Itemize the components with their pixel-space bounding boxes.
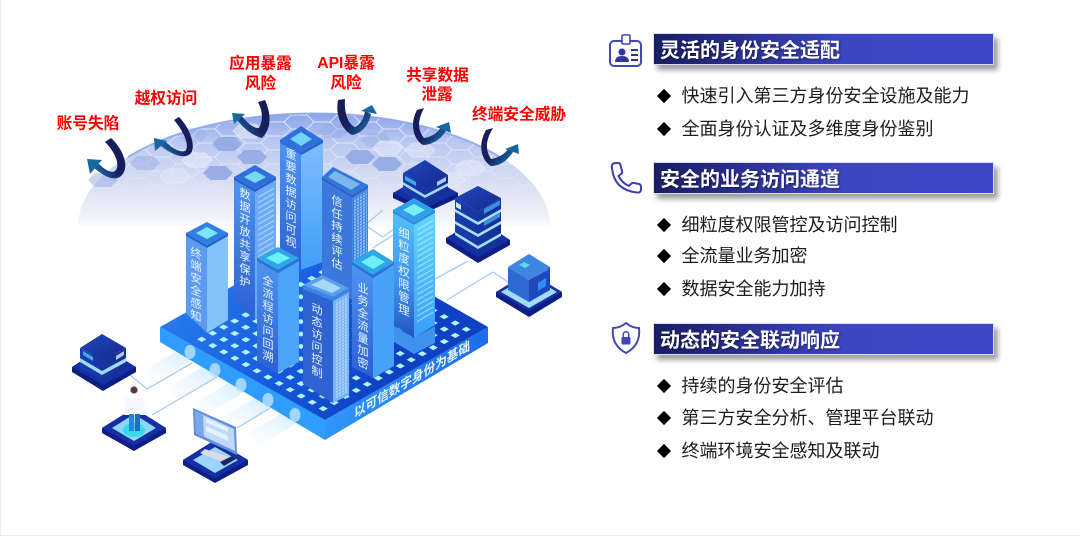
tower: 细粒度权限管理 <box>393 198 435 354</box>
tower: 重要数据访问可视 <box>280 126 323 270</box>
bullet: continuous evaluation <box>657 376 844 396</box>
bullet: authentication <box>657 119 934 139</box>
risk labels: 账号失陷 <box>57 114 119 132</box>
panel: feature list: 全面身份认证及多维度身份鉴别 <box>682 119 934 139</box>
tower: 业务全流量加密: 业务全流量加密 <box>356 279 368 372</box>
tower: 终端安全感知: 终端安全感知 <box>189 244 201 325</box>
tower: 动态访问控制: 动态访问控制 <box>310 300 322 381</box>
tower: 数据开放共享保护 <box>234 165 276 320</box>
icon: phone <box>612 163 641 193</box>
risk labels: 风险 <box>330 73 362 92</box>
panel: feature list: 持续的身份安全评估 <box>682 376 844 396</box>
risk arrows <box>87 99 519 178</box>
bullet: data security <box>657 279 826 299</box>
heading: dynamic security response <box>653 323 994 355</box>
connector lines <box>130 210 508 428</box>
panel: feature list: 第三方安全分析、管理平台联动 <box>682 408 934 428</box>
arrow: API exposure <box>337 99 377 135</box>
server: left <box>72 334 136 391</box>
tower: 动态访问控制 <box>303 275 349 403</box>
arrow: endpoint threat <box>481 128 519 166</box>
tower: 业务全流量加密 <box>352 249 394 378</box>
risk labels: API暴露 <box>317 54 375 72</box>
tower: 全流程访问回溯: 全流程访问回溯 <box>261 272 273 365</box>
heading: secure business access channel <box>653 162 994 194</box>
tower: 全流程访问回溯 <box>257 247 299 373</box>
tower: 终端安全感知 <box>186 222 228 333</box>
risk labels: 风险 <box>245 74 276 92</box>
risk labels: 应用暴露 <box>229 54 292 72</box>
server: cube right <box>496 254 562 317</box>
icon: id badge <box>610 35 641 66</box>
icon: shield with lock <box>613 323 639 353</box>
arrow: shared data leak <box>413 108 451 145</box>
computer on pedestal <box>183 408 248 483</box>
arrow: account compromise <box>87 138 125 178</box>
panel: feature list: 数据安全能力加持 <box>682 279 826 299</box>
person on pedestal <box>102 386 166 451</box>
panel: feature list: 全流量业务加密 <box>682 246 808 266</box>
bullet: third-party integration <box>657 86 970 106</box>
risk labels <box>57 54 566 132</box>
platform base <box>160 234 488 440</box>
panel: feature list: 快速引入第三方身份安全设施及能力 <box>682 86 970 106</box>
bullet: encryption <box>657 246 808 266</box>
risk labels: 终端安全威胁 <box>472 104 566 124</box>
heading: flexible identity security: 灵活的身份安全适配 <box>660 40 840 62</box>
tower: 信任持续评估: 信任持续评估 <box>330 192 342 273</box>
server: top right <box>393 160 458 213</box>
dome with hexagon pattern <box>78 113 550 226</box>
heading: flexible identity security <box>653 33 994 65</box>
tower: 细粒度权限管理: 细粒度权限管理 <box>397 224 410 319</box>
light beams from platform <box>142 346 300 447</box>
tower: 数据开放共享保护: 数据开放共享保护 <box>238 185 250 291</box>
arrow: application exposure <box>232 100 270 138</box>
risk labels: 共享数据 <box>406 66 469 84</box>
tower: 信任持续评估 <box>322 167 368 300</box>
heading: dynamic security response: 动态的安全联动响应 <box>660 330 840 352</box>
bullet: third-party linkage <box>657 408 934 428</box>
tower: 重要数据访问可视: 重要数据访问可视 <box>284 145 296 251</box>
server: rack right <box>446 186 510 263</box>
heading: secure business access channel: 安全的业务访问通道 <box>660 169 840 191</box>
panel: feature list: 细粒度权限管控及访问控制 <box>682 215 898 235</box>
arrow: unauthorized access <box>154 117 193 156</box>
risk labels: 泄露 <box>421 86 453 104</box>
bullet: endpoint linkage <box>657 441 880 461</box>
panel: feature list: 终端环境安全感知及联动 <box>682 441 880 461</box>
bullet: access control <box>657 215 898 235</box>
platform caption: 以可信数字身份为基础 <box>354 338 470 421</box>
risk labels: 越权访问 <box>135 88 197 108</box>
